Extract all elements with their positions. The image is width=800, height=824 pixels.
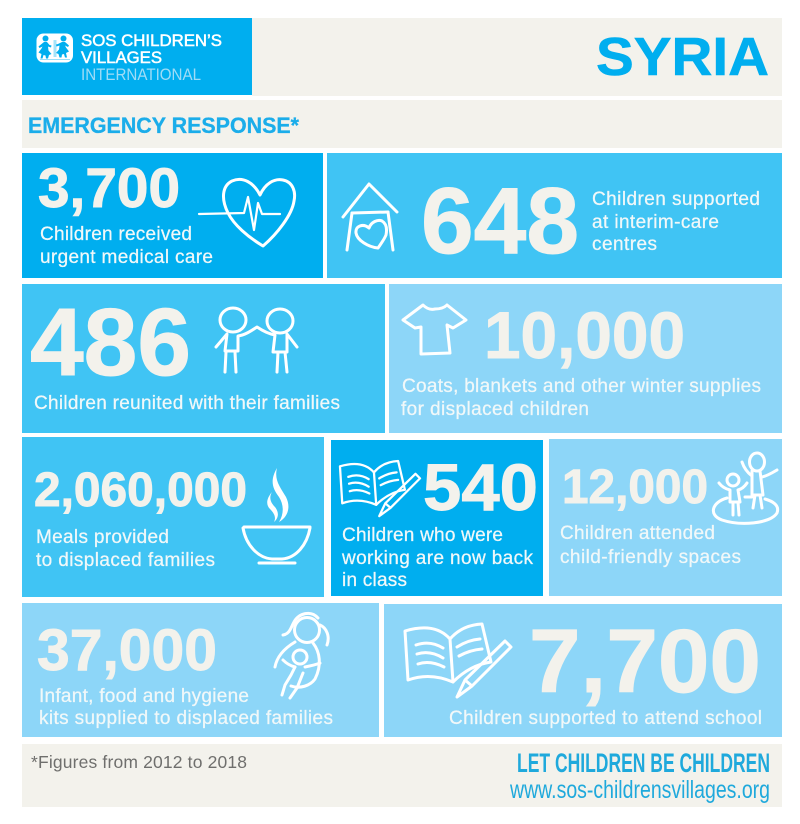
icon: house with heart <box>343 184 397 250</box>
panel: child-friendly spaces: Children attended <box>560 523 715 544</box>
icon: steaming bowl <box>243 468 310 563</box>
footer band: *Figures from 2012 to 2018 <box>31 752 247 772</box>
header band: country title <box>252 18 782 96</box>
panel: meals: to displaced families <box>36 550 215 571</box>
panel: winter supplies <box>389 284 782 433</box>
panel: child-friendly spaces <box>549 439 782 596</box>
icon: t-shirt <box>403 305 466 354</box>
panel: medical care: 3,700 <box>38 156 180 219</box>
panel: logo <box>22 18 252 95</box>
panel: logo: INTERNATIONAL <box>81 66 201 84</box>
heading: emergency response <box>22 100 782 148</box>
panel: winter supplies: for displaced children <box>401 399 589 420</box>
panel: back in class: working are now back <box>341 548 534 569</box>
heading: emergency response: EMERGENCY RESPONSE* <box>28 113 299 138</box>
icon: book and pencil <box>405 624 511 697</box>
icon: heart with pulse <box>199 179 295 246</box>
panel: infant kits: Infant, food and hygiene <box>39 686 249 707</box>
panel: logo: VILLAGES <box>81 49 162 67</box>
panel: medical care: Children received <box>40 224 192 245</box>
icon: children playing <box>713 453 778 523</box>
panel: interim care: centres <box>592 234 657 255</box>
panel: child-friendly spaces: child-friendly spaces <box>560 547 741 568</box>
panel: school support: 7,700 <box>529 612 761 712</box>
panel: infant kits: 37,000 <box>37 618 217 683</box>
panel: interim care <box>327 153 782 278</box>
panel: interim care: 648 <box>421 168 579 273</box>
panel: reunited: 486 <box>30 289 191 396</box>
icon: SOS children logo <box>36 34 73 62</box>
panel: meals: Meals provided <box>36 527 169 548</box>
panel: medical care <box>22 153 323 278</box>
panel: logo: SOS CHILDREN’S <box>81 32 222 50</box>
panel: winter supplies: 10,000 <box>484 298 685 372</box>
panel: infant kits: kits supplied to displaced families <box>39 708 333 729</box>
panel: back in class: 540 <box>423 450 538 524</box>
panel: medical care: urgent medical care <box>40 247 213 268</box>
panel: reunited <box>22 284 385 433</box>
panel: interim care: at interim-care <box>592 212 719 233</box>
panel: back in class <box>331 440 543 596</box>
panel: back in class: Children who were <box>342 525 503 546</box>
panel: reunited: Children reunited with their families <box>34 393 340 414</box>
panel: back in class: in class <box>342 570 407 591</box>
icon: mother and baby <box>275 613 328 698</box>
panel: school support <box>384 604 782 737</box>
header band: country title: SYRIA <box>596 27 769 87</box>
panel: interim care: Children supported <box>592 189 760 210</box>
panel: meals <box>22 437 324 597</box>
icon: book and pencil <box>340 461 420 516</box>
panel: infant kits <box>22 603 379 737</box>
panel: winter supplies: Coats, blankets and other winter supplies <box>402 376 761 397</box>
icon: two children holding hands <box>216 308 297 372</box>
footer band <box>22 744 782 807</box>
panel: school support: Children supported to attend school <box>449 708 762 729</box>
panel: child-friendly spaces: 12,000 <box>562 461 708 514</box>
panel: meals: 2,060,000 <box>34 464 247 517</box>
